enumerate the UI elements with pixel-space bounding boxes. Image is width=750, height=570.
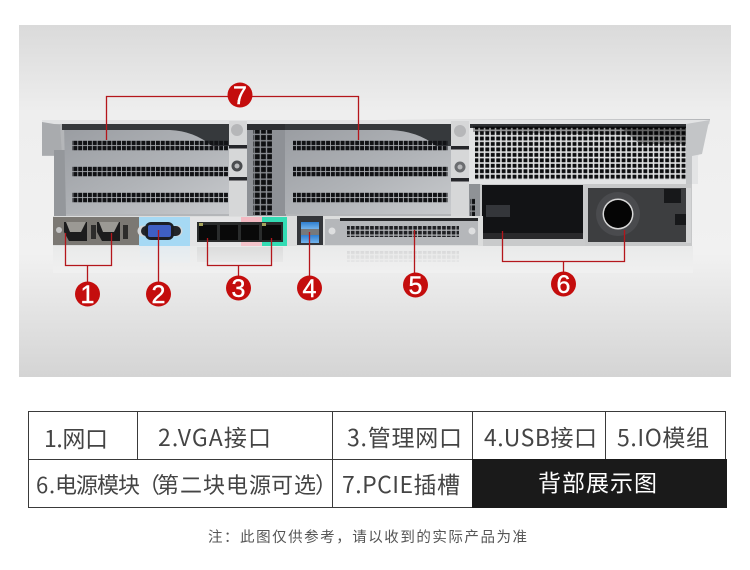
callout 7: PCIE slots: 7 bbox=[233, 82, 247, 110]
legend: management port: 3.管理网口 bbox=[347, 419, 462, 453]
table frame bbox=[28, 412, 726, 508]
black title cell bbox=[472, 459, 727, 508]
legend table bbox=[28, 412, 727, 508]
server chassis rear view bbox=[42, 119, 710, 246]
USB ports bbox=[297, 216, 323, 245]
callout 6: power modules: 6 bbox=[557, 271, 570, 299]
left mounting ear bbox=[42, 122, 62, 155]
left side wall bbox=[54, 150, 66, 217]
PCIE riser left bbox=[62, 124, 229, 214]
callout 3: management ports bbox=[208, 238, 272, 303]
chassis body bbox=[42, 119, 710, 245]
PCIE riser right bbox=[285, 124, 451, 214]
power bay blank plate bbox=[585, 184, 692, 246]
VGA port bbox=[138, 217, 190, 246]
footnote: 注：此图仅供参考，请以收到的实际产品为准 bbox=[208, 526, 527, 547]
legend: IO module: 5.IO模组 bbox=[617, 419, 709, 453]
legend: VGA: 2.VGA接口 bbox=[158, 419, 271, 453]
lower IO strip base bbox=[53, 216, 483, 246]
small vent strip bbox=[469, 184, 481, 219]
callout 4: USB: 4 bbox=[303, 275, 317, 303]
callout 2: VGA bbox=[146, 230, 171, 309]
right mounting ear bbox=[686, 120, 710, 186]
network module bbox=[53, 217, 139, 245]
legend: USB: 4.USB接口 bbox=[484, 419, 597, 453]
callout 5: IO module: 5 bbox=[409, 272, 422, 300]
callout 7: PCIE slots bbox=[106, 82, 358, 140]
power bay open bbox=[480, 184, 587, 246]
thumbscrew bracket left bbox=[229, 121, 247, 217]
panel: server rear photo background bbox=[19, 25, 731, 377]
legend: network port: 1.网口 bbox=[44, 420, 108, 454]
black title cell: 背部展示图 bbox=[538, 464, 657, 498]
IO module slot bbox=[325, 218, 478, 245]
center vertical vent bbox=[247, 124, 286, 216]
legend: power module: 6.电源模块（第二块电源可选） bbox=[36, 468, 337, 500]
callout 1: network ports bbox=[66, 233, 112, 309]
callout 4: USB bbox=[297, 232, 322, 303]
callout 3: management ports: 3 bbox=[232, 275, 245, 303]
callout 6: power modules bbox=[502, 230, 624, 299]
callout 2: VGA: 2 bbox=[152, 281, 165, 309]
LAN ports bbox=[190, 217, 287, 246]
chassis top edge bbox=[42, 120, 710, 124]
callout 1: network ports: 1 bbox=[81, 281, 94, 309]
callout 5: IO module bbox=[403, 230, 428, 300]
power supply grille bbox=[469, 124, 698, 184]
legend: PCIE slots: 7.PCIE插槽 bbox=[342, 466, 460, 500]
thumbscrew bracket right bbox=[451, 121, 469, 217]
product reflection bbox=[53, 246, 693, 273]
